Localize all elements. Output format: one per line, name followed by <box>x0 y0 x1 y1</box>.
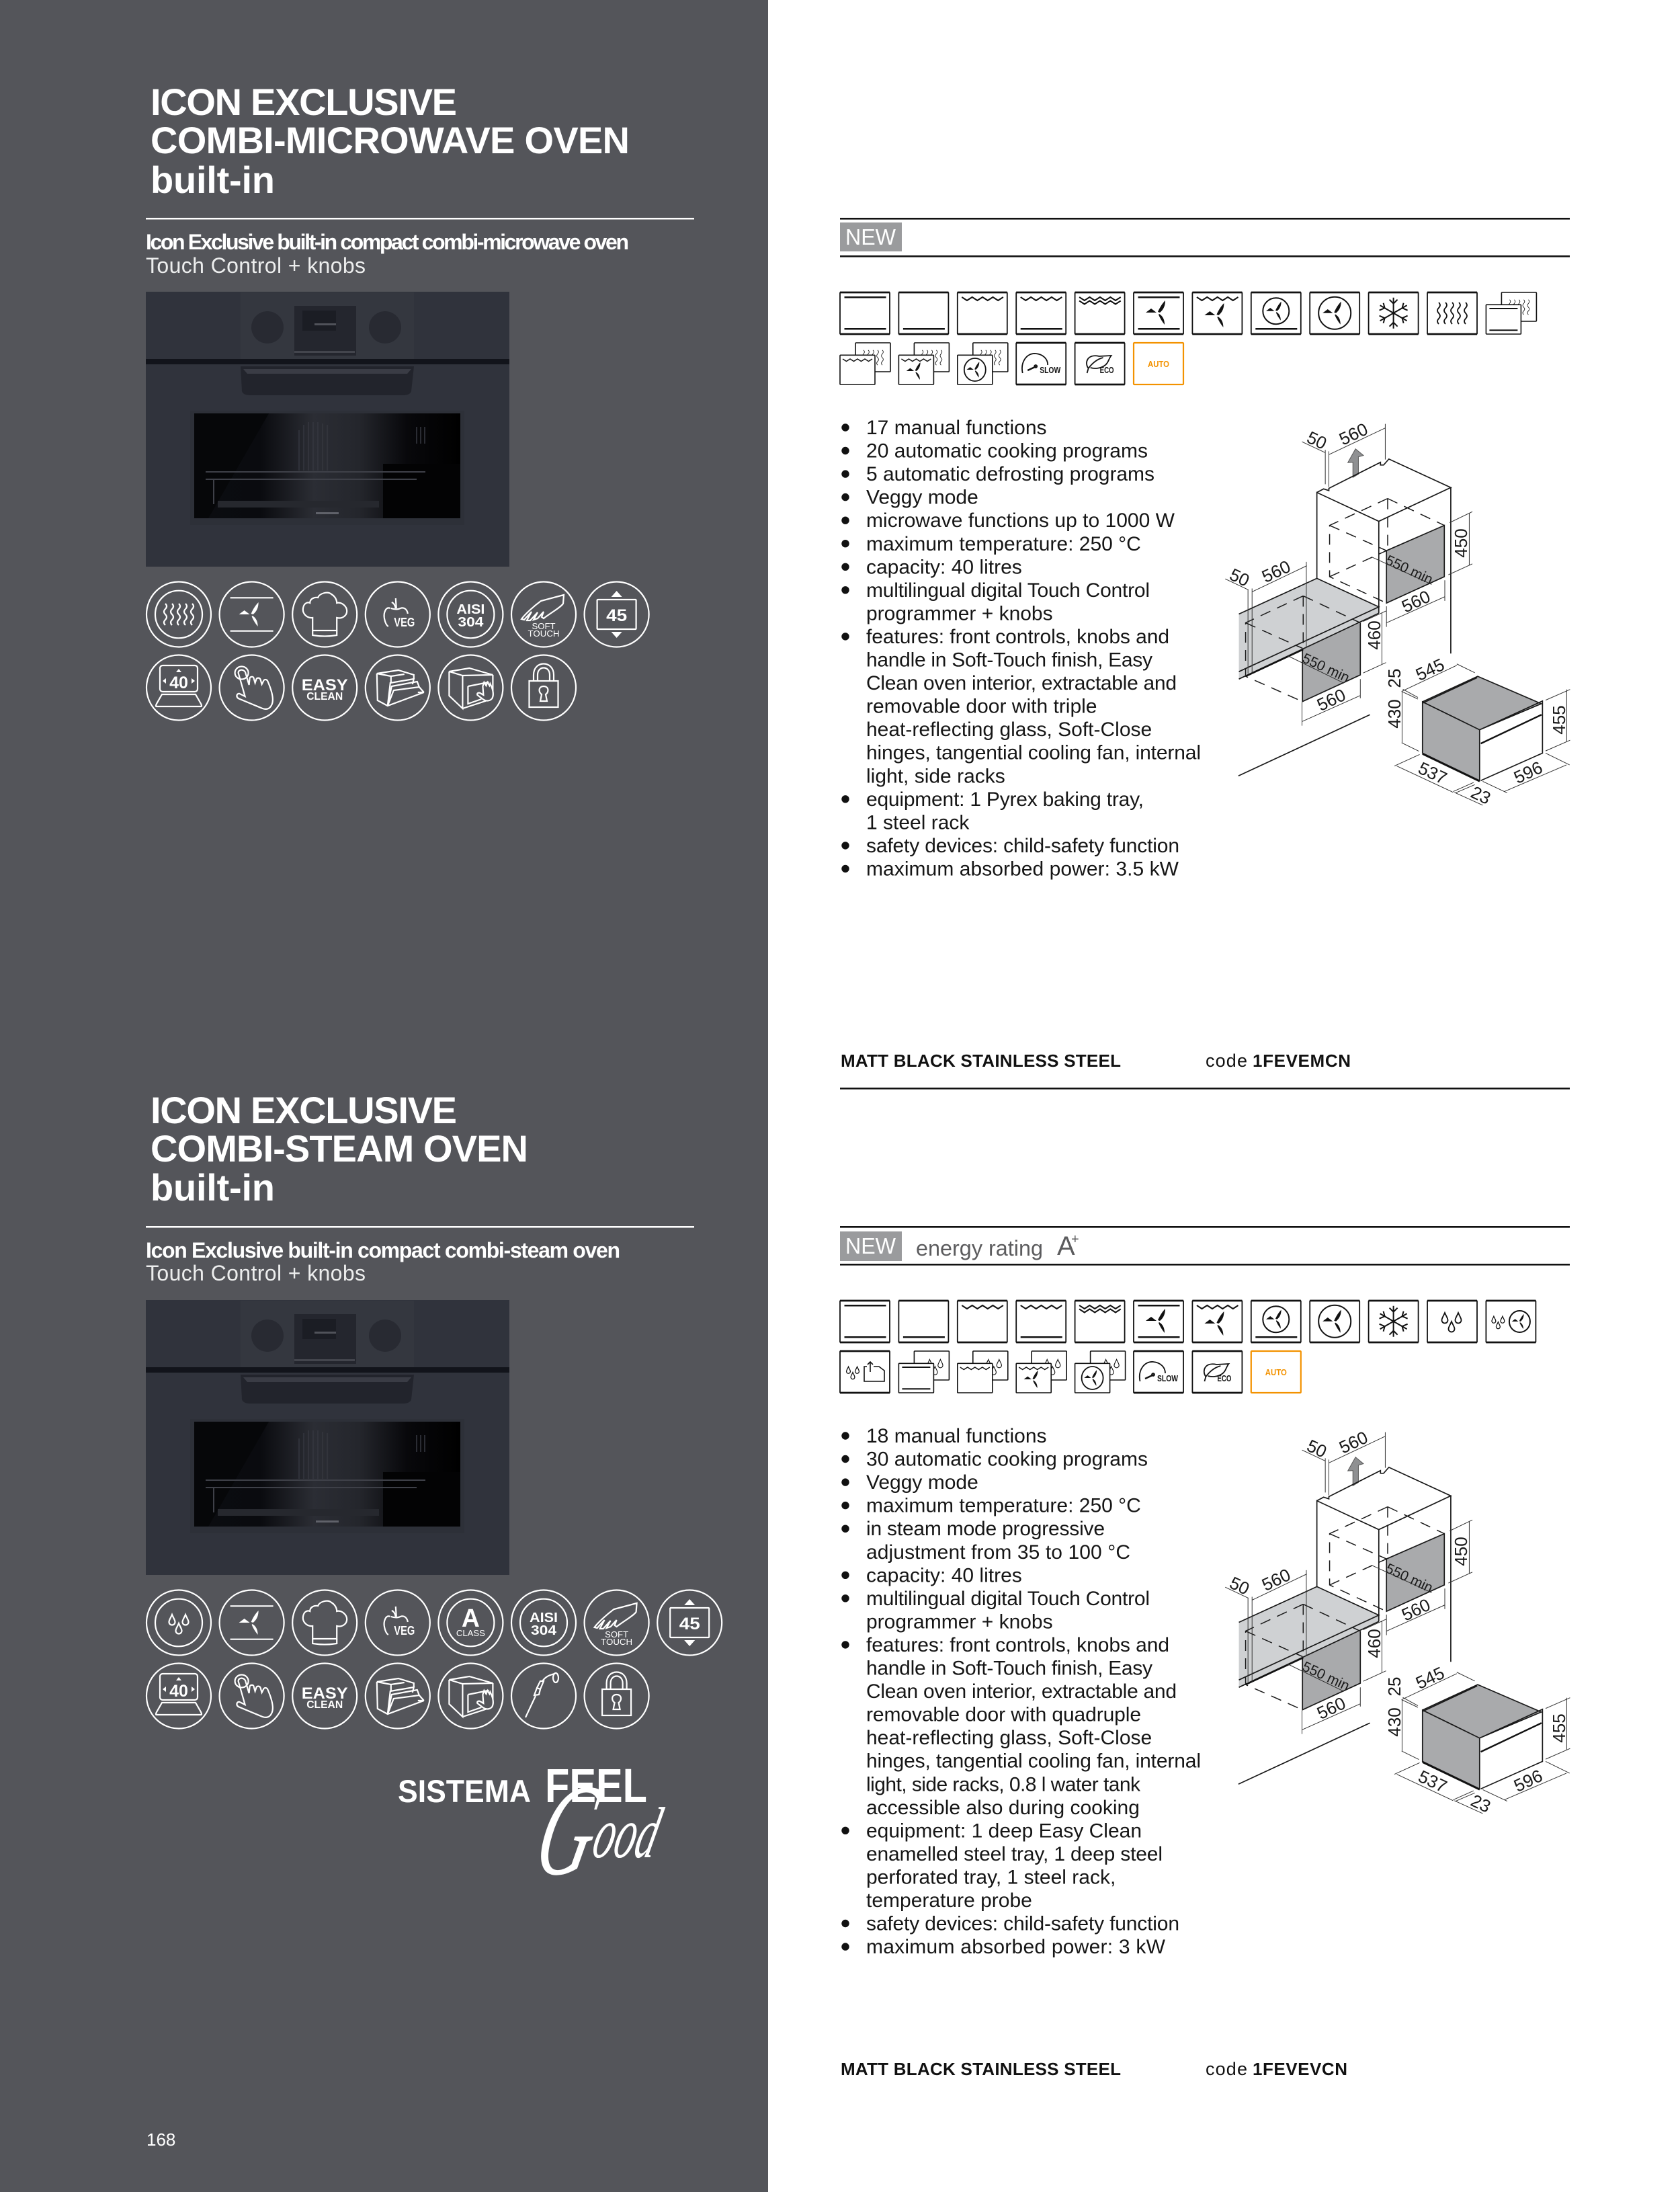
feature list: second product: maximum temperature: 250 °C <box>866 1495 1141 1517</box>
logo: Sistema Feel Good <box>398 1758 678 1903</box>
function: auto <box>1251 1351 1301 1393</box>
installation diagram: first product: 560 <box>1314 684 1349 715</box>
section rules and NEW badge: first product <box>840 218 1570 257</box>
subtitle: first product <box>146 230 629 278</box>
icon: easy clean: EASY <box>302 676 348 694</box>
installation diagram: first product: 460 <box>1364 620 1384 650</box>
function: microwave and circular fan <box>958 343 1008 384</box>
icon: 40 litres <box>146 1663 211 1729</box>
logo: Sistema Feel Good: G <box>523 1758 614 1903</box>
icon: A class: A <box>462 1605 480 1633</box>
installation diagram: second product: 537 <box>1415 1766 1450 1797</box>
function: circular fan <box>1310 292 1359 334</box>
function: eco: ECO <box>1100 365 1114 375</box>
feature list: first product: 20 automatic cooking programs <box>866 440 1148 462</box>
function: slow: SLOW <box>1040 365 1061 375</box>
installation diagram: first product: 537 <box>1415 758 1450 788</box>
function: defrost <box>1369 292 1419 334</box>
feature list: second product: light, side racks, 0.8 l water tank <box>866 1773 1141 1795</box>
installation diagram: first product: 25 <box>1384 669 1404 688</box>
footer: first product finish and code: MATT BLACK STAINLESS STEEL <box>841 1051 1121 1071</box>
feature list: second product: equipment: 1 deep Easy Clean <box>866 1820 1142 1842</box>
installation diagram: first product: 596 <box>1511 757 1546 788</box>
feature list: second product: hinges, tangential cooling fan, internal <box>866 1750 1201 1773</box>
subtitle: first product: Touch Control + knobs <box>146 253 366 278</box>
function icons: first product <box>840 292 1536 384</box>
installation diagram: second product: 450 <box>1451 1537 1471 1566</box>
feature list: second product: capacity: 40 litres <box>866 1564 1022 1586</box>
function: microwave and grill <box>840 343 890 384</box>
subtitle: first product: Icon Exclusive built-in compact combi-microwave oven <box>146 230 629 254</box>
icon: AISI 304 <box>511 1590 576 1655</box>
function: double grill <box>1075 292 1125 334</box>
function: steam and circular fan <box>1486 1301 1536 1342</box>
title: combi-microwave oven: COMBI-MICROWAVE OVEN <box>151 119 630 161</box>
installation diagram: first product: 560 <box>1259 556 1294 587</box>
function icons: second product <box>840 1301 1536 1393</box>
icon: soft touch <box>585 1590 649 1655</box>
installation diagram: first product: 550 min <box>1383 553 1435 587</box>
feature list: first product: light, side racks <box>866 765 1005 787</box>
feature list: second product: adjustment from 35 to 100 °C <box>866 1541 1130 1564</box>
function: top and bottom heat <box>840 1301 890 1342</box>
icon: chef hat <box>292 1590 357 1655</box>
installation diagram: second product: 560 <box>1336 1427 1371 1457</box>
function: circular fan and bottom <box>1251 1301 1301 1342</box>
feature list: second product: 18 manual functions <box>866 1425 1047 1447</box>
icon: 40 litres <box>146 655 211 721</box>
installation diagram: first product: 430 <box>1384 699 1404 729</box>
icon: AISI 304: AISI <box>456 602 485 617</box>
function: grill and bottom <box>1016 292 1066 334</box>
icon: soft touch: SOFT <box>532 621 556 631</box>
feature list: second product: perforated tray, 1 steel rack, <box>866 1866 1116 1888</box>
feature list: second product: Veggy mode <box>866 1471 978 1494</box>
function: steam, grill and fan <box>1016 1351 1066 1393</box>
icon: 45 cm <box>657 1590 722 1655</box>
feature list: first product: safety devices: child-safety function <box>866 835 1179 857</box>
section rules and NEW badge: first product: NEW <box>845 225 896 249</box>
feature list: second product: Clean oven interior, extractable and <box>866 1680 1177 1703</box>
product photo: steam oven <box>146 1300 509 1575</box>
feature list: first product: maximum absorbed power: 3.5 kW <box>866 858 1179 880</box>
icon: A class <box>438 1590 503 1655</box>
installation diagram: second product: 550 min <box>1383 1561 1435 1596</box>
title: combi-steam oven: ICON EXCLUSIVE <box>151 1089 457 1131</box>
feature list: first product: 17 manual functions <box>866 417 1047 439</box>
subtitle: second product <box>146 1238 620 1285</box>
feature list: first product: microwave functions up to 1000 W <box>866 510 1175 532</box>
function: eco <box>1192 1351 1242 1393</box>
feature list: first product: handle in Soft-Touch finish, Easy <box>866 649 1152 671</box>
logo: Sistema Feel Good: FEEL <box>545 1760 647 1813</box>
installation diagram: second product: 560 <box>1259 1564 1294 1595</box>
footer: first product finish and code <box>840 1051 1570 1090</box>
function: auto <box>1134 343 1183 384</box>
icon: soft touch <box>511 582 576 647</box>
icon: touch control <box>220 1663 284 1729</box>
icon: child lock <box>511 655 576 721</box>
function: slow <box>1134 1351 1183 1393</box>
function: fan grill <box>1192 1301 1242 1342</box>
title: combi-microwave oven <box>151 81 630 201</box>
function: slow <box>1016 343 1066 384</box>
footer: first product finish and code: code <box>1206 1051 1247 1071</box>
icon: 40 litres: 40 <box>169 674 188 692</box>
installation diagram: second product <box>1225 1427 1570 1817</box>
function: grill and bottom <box>1016 1301 1066 1342</box>
function: top and bottom heat <box>840 292 890 334</box>
icon: child lock <box>585 1663 649 1729</box>
function: bottom heat <box>898 292 948 334</box>
function: defrost <box>1369 1301 1419 1342</box>
feature list: second product: safety devices: child-safety function <box>866 1913 1179 1935</box>
panel: dark left column <box>0 0 768 2192</box>
feature list: second product: enamelled steel tray, 1 deep steel <box>866 1843 1163 1865</box>
icon: triple glass door <box>366 655 430 721</box>
installation diagram: second product: 560 <box>1314 1693 1349 1723</box>
icon: temperature probe <box>511 1663 576 1729</box>
feature list: first product: hinges, tangential cooling fan, internal <box>866 742 1201 764</box>
icon: steam <box>146 1590 211 1655</box>
product photo: microwave oven <box>146 292 509 567</box>
installation diagram: second product: 560 <box>1398 1594 1433 1625</box>
icon: 45 cm: 45 <box>679 1615 700 1633</box>
feature list: second product: heat-reflecting glass, Soft-Close <box>866 1727 1152 1749</box>
installation diagram: second product: 430 <box>1384 1707 1404 1737</box>
icon: AISI 304: 304 <box>531 1623 557 1638</box>
icon: AISI 304 <box>438 582 503 647</box>
installation diagram: first product <box>1225 419 1570 809</box>
feature list: first product: Clean oven interior, extractable and <box>866 672 1177 694</box>
function: fan grill <box>1192 292 1242 334</box>
installation diagram: second product: 50 <box>1226 1572 1253 1599</box>
logo: Sistema Feel Good: ood <box>586 1793 669 1873</box>
function: auto: AUTO <box>1265 1367 1287 1377</box>
title: combi-steam oven: built-in <box>151 1166 275 1209</box>
icon: easy clean: EASY <box>302 1684 348 1703</box>
function: fan static <box>1134 292 1183 334</box>
installation diagram: first product: 455 <box>1549 705 1569 735</box>
feature list: first product: capacity: 40 litres <box>866 556 1022 578</box>
feature list: first product: 5 automatic defrosting programs <box>866 463 1154 485</box>
subtitle: second product: Touch Control + knobs <box>146 1261 366 1285</box>
function: steam and circular fan <box>1075 1351 1126 1393</box>
feature list: second product: features: front controls, knobs and <box>866 1634 1169 1656</box>
section rules, NEW badge and energy rating: second product <box>840 1226 1570 1266</box>
icon: oven door hand <box>438 655 503 721</box>
page number: 168 <box>146 2129 175 2150</box>
icon: easy clean <box>292 655 357 721</box>
installation diagram: second product: 545 <box>1413 1662 1447 1693</box>
section rules, NEW badge and energy rating: second product: + <box>1071 1232 1079 1247</box>
icon: soft touch: TOUCH <box>528 628 559 639</box>
function: auto: AUTO <box>1148 359 1169 369</box>
icon: fan with elements <box>220 1590 284 1655</box>
feature list: first product: programmer + knobs <box>866 602 1053 624</box>
feature list: first product: maximum temperature: 250 °C <box>866 533 1141 555</box>
feature list: second product: handle in Soft-Touch finish, Easy <box>866 1658 1152 1679</box>
title: combi-microwave oven: built-in <box>151 159 275 201</box>
footer: second product finish and code: MATT BLACK STAINLESS STEEL <box>841 2059 1121 2079</box>
feature list: first product <box>841 417 1201 880</box>
icon: veg: VEG <box>394 616 415 629</box>
icon: AISI 304: AISI <box>530 1611 558 1625</box>
installation diagram: first product: 560 <box>1398 586 1433 616</box>
feature list: second product: removable door with quadruple <box>866 1704 1141 1726</box>
function: fan static <box>1134 1301 1183 1342</box>
function: grill <box>958 1301 1007 1342</box>
icon: quadruple glass door <box>366 1663 430 1729</box>
feature list: first product: multilingual digital Touch Control <box>866 579 1150 602</box>
function: grill <box>958 292 1007 334</box>
function: circular fan and bottom <box>1251 292 1301 334</box>
icon: veg <box>366 1590 430 1655</box>
feature list: first product: removable door with triple <box>866 696 1097 718</box>
icon: microwave <box>146 582 211 647</box>
function: circular fan <box>1310 1301 1359 1342</box>
feature list: first product: equipment: 1 Pyrex baking tray, <box>866 788 1144 811</box>
function: double grill <box>1075 1301 1125 1342</box>
function: microwave, grill and fan <box>898 343 949 384</box>
title: combi-microwave oven: ICON EXCLUSIVE <box>151 81 457 123</box>
icon: 40 litres: 40 <box>169 1682 188 1701</box>
installation diagram: first product: 50 <box>1304 427 1330 454</box>
icon: easy clean <box>292 1663 357 1729</box>
installation diagram: first product: 50 <box>1226 564 1253 591</box>
section rules, NEW badge and energy rating: second product: A <box>1057 1231 1075 1261</box>
section rules, NEW badge and energy rating: second product: NEW <box>845 1233 896 1258</box>
icon: oven door hand <box>438 1663 503 1729</box>
icon: chef hat <box>292 582 357 647</box>
divider rule under second title <box>146 1226 694 1227</box>
feature list: second product: multilingual digital Touch Control <box>866 1588 1150 1610</box>
function: eco <box>1075 343 1125 384</box>
icon: 45 cm <box>585 582 649 647</box>
feature list: second product: 30 automatic cooking programs <box>866 1449 1148 1471</box>
installation diagram: first product: 550 min <box>1300 651 1352 686</box>
icon: touch control <box>220 655 284 721</box>
installation diagram: second product: 50 <box>1304 1435 1330 1462</box>
function: slow: SLOW <box>1157 1373 1179 1383</box>
function: microwave and top bottom heat <box>1486 292 1536 334</box>
installation diagram: first product: 560 <box>1336 419 1371 449</box>
installation diagram: second product: 25 <box>1384 1677 1404 1696</box>
feature list: first product: features: front controls, knobs and <box>866 626 1169 648</box>
icon: soft touch: SOFT <box>605 1629 628 1639</box>
feature list: second product: programmer + knobs <box>866 1611 1053 1633</box>
function: eco: ECO <box>1217 1373 1231 1383</box>
feature list: second product: in steam mode progressive <box>866 1518 1105 1540</box>
function: bottom heat <box>898 1301 948 1342</box>
footer: second product finish and code: 1FEVEVCN <box>1253 2059 1347 2079</box>
icon: easy clean: CLEAN <box>306 691 343 702</box>
footer: first product finish and code: 1FEVEMCN <box>1253 1051 1351 1071</box>
feature list: first product: heat-reflecting glass, Soft-Close <box>866 719 1152 741</box>
function: steam descaling <box>840 1351 890 1393</box>
installation diagram: second product: 550 min <box>1300 1659 1352 1694</box>
icon: fan with elements <box>220 582 284 647</box>
feature list: second product: temperature probe <box>866 1890 1032 1912</box>
feature list: second product: maximum absorbed power: 3 kW <box>866 1936 1166 1958</box>
icon: 45 cm: 45 <box>606 606 627 625</box>
installation diagram: first product: 450 <box>1451 528 1471 558</box>
section rules, NEW badge and energy rating: second product: energy rating <box>916 1236 1043 1260</box>
feature list: first product: Veggy mode <box>866 487 978 509</box>
feature list: first product: 1 steel rack <box>866 811 970 834</box>
function: steam <box>1427 1301 1477 1342</box>
title: combi-steam oven: COMBI-STEAM OVEN <box>151 1127 528 1170</box>
function: microwave <box>1427 292 1477 334</box>
installation diagram: second product: 596 <box>1511 1765 1546 1796</box>
function: steam and top bottom heat <box>898 1351 949 1393</box>
installation diagram: second product: 460 <box>1364 1629 1384 1658</box>
footer: second product finish and code <box>841 2059 1347 2079</box>
logo: Sistema Feel Good: SISTEMA <box>398 1773 531 1809</box>
divider rule under first title <box>146 218 694 219</box>
footer: second product finish and code: code <box>1206 2059 1247 2079</box>
icon: veg: VEG <box>394 1624 415 1637</box>
title: combi-steam oven <box>151 1089 528 1209</box>
installation diagram: first product: 23 <box>1468 782 1494 809</box>
feature icons: first product <box>146 582 649 721</box>
icon: easy clean: CLEAN <box>306 1699 343 1711</box>
function: steam and grill <box>958 1351 1008 1393</box>
icon: soft touch: TOUCH <box>601 1637 632 1647</box>
subtitle: second product: Icon Exclusive built-in compact combi-steam oven <box>146 1238 620 1262</box>
icon: AISI 304: 304 <box>458 615 484 630</box>
installation diagram: first product: 545 <box>1413 654 1447 685</box>
feature list: second product <box>841 1425 1201 1958</box>
installation diagram: second product: 455 <box>1549 1713 1569 1743</box>
icon: A class: CLASS <box>456 1628 485 1638</box>
feature icons: second product <box>146 1590 722 1729</box>
feature list: second product: accessible also during cooking <box>866 1797 1140 1819</box>
installation diagram: second product: 23 <box>1468 1790 1494 1817</box>
icon: veg <box>366 582 430 647</box>
